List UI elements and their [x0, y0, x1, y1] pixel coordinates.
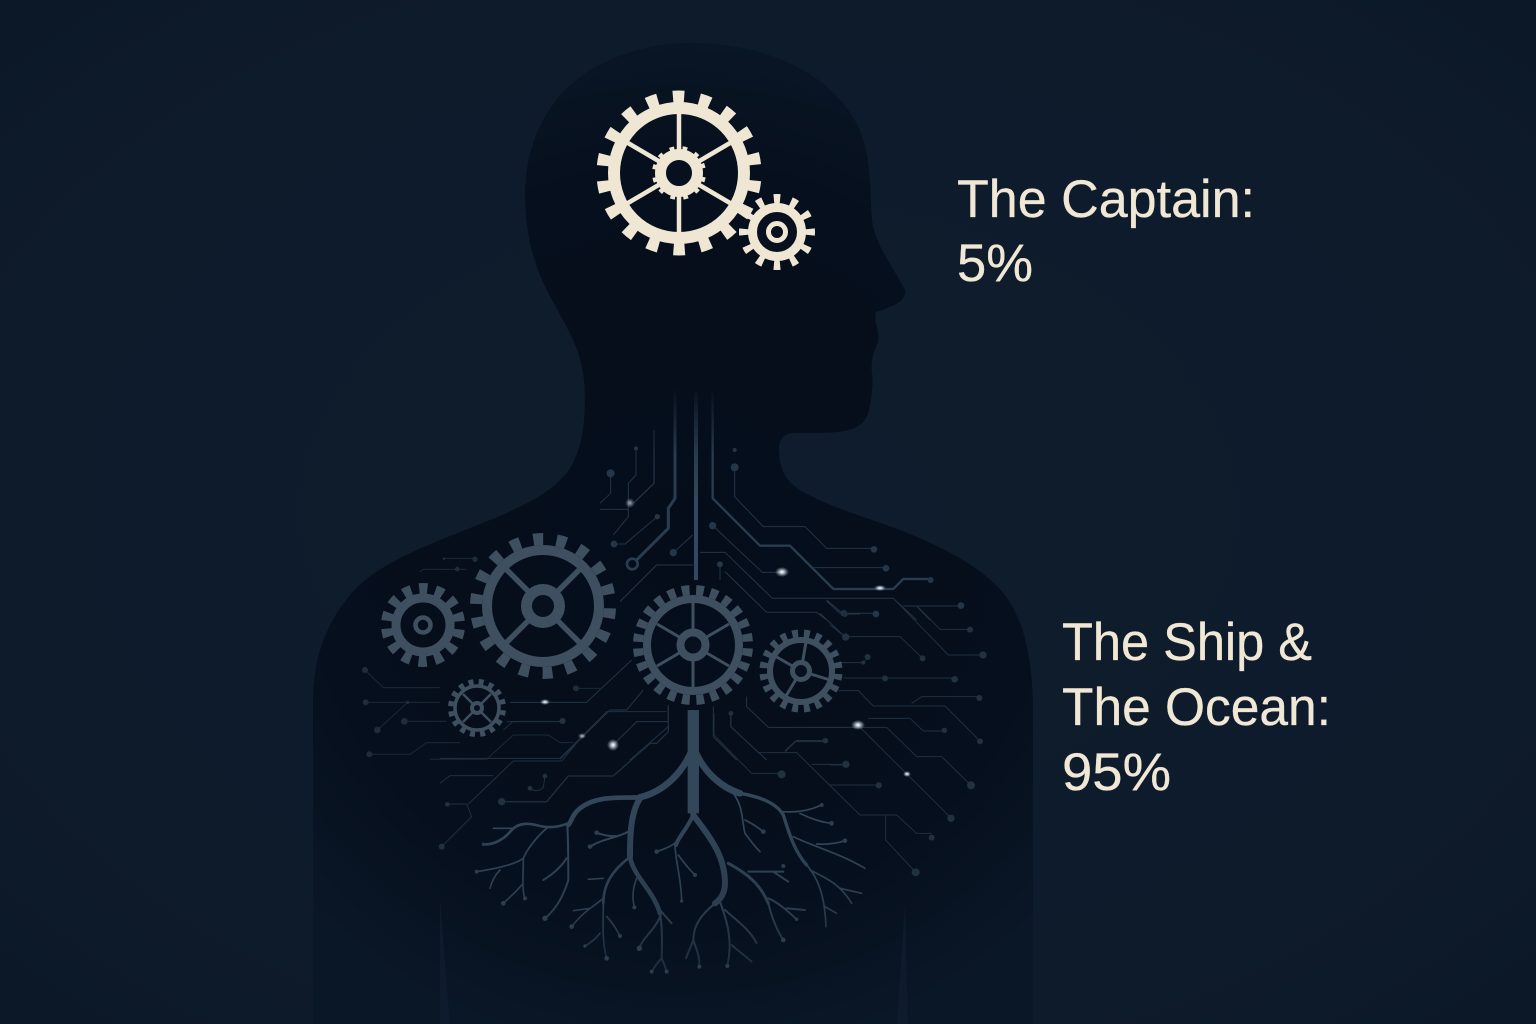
- label: The Captain 5%: The Captain:: [957, 170, 1255, 229]
- left chest traces: [362, 557, 860, 760]
- human silhouette: [313, 43, 1033, 1024]
- gear: small slate: [451, 682, 503, 734]
- gear: large cream: [602, 96, 756, 250]
- gear: small cream: [744, 199, 810, 265]
- vertical spine line: [694, 392, 698, 580]
- arm gap: right: [897, 903, 908, 1024]
- gear: central slate: [638, 590, 748, 700]
- trunk: [676, 710, 710, 813]
- lower chest traces: [439, 705, 935, 876]
- label: The Ship and The Ocean 95%: The Ocean:: [1062, 678, 1331, 737]
- root system: [475, 710, 865, 974]
- arm gap: left: [440, 900, 450, 1024]
- gear: large slate: [476, 539, 610, 673]
- gear: right slate: [764, 634, 838, 708]
- circuit traces: [362, 390, 987, 876]
- gear: shoulder left: [386, 588, 460, 662]
- main branches: [568, 797, 640, 825]
- label: The Captain 5%: [957, 170, 1255, 293]
- label: The Ship and The Ocean 95%: [1062, 613, 1331, 802]
- label: The Ship and The Ocean 95%: The Ship &: [1062, 613, 1312, 672]
- neck and chest traces: [600, 390, 964, 620]
- right chest traces: [830, 598, 987, 822]
- label: The Captain 5%: 5%: [957, 234, 1033, 293]
- glowing sparks: [540, 498, 911, 777]
- label: The Ship and The Ocean 95%: 95%: [1062, 743, 1171, 802]
